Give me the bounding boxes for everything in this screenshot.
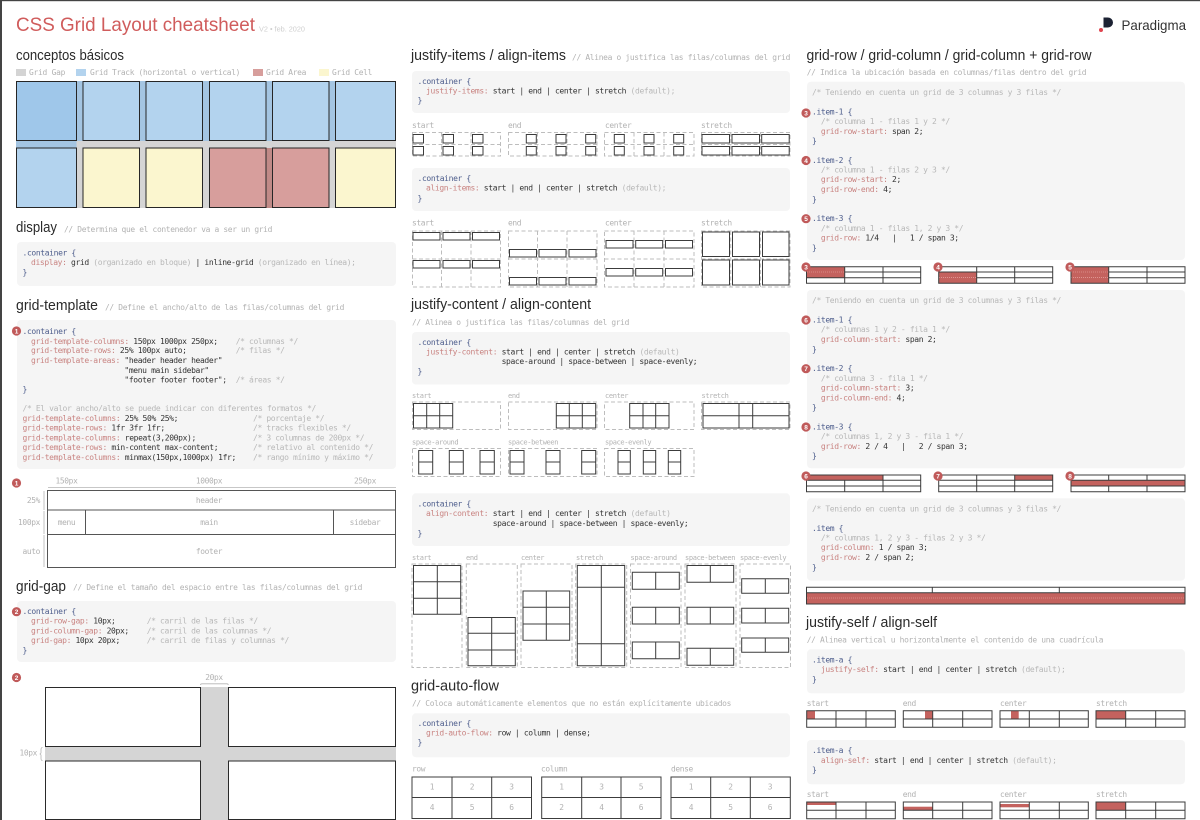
code: grid-row items: /* columna 1 - filas 1 y 2 */	[821, 117, 950, 126]
heading: grid-auto-flow: grid-auto-flow	[411, 679, 499, 695]
grid-auto-flow: dense: dense	[671, 764, 694, 774]
grid-auto-flow: row: 3	[509, 782, 514, 792]
code: justify-items: .container {	[418, 77, 471, 86]
grid-template diagram: main	[200, 518, 218, 527]
code: grid-column items: }	[812, 452, 816, 460]
legend: Grid Area	[266, 68, 307, 77]
title: CSS Grid Layout cheatsheet	[16, 14, 256, 36]
code: align-self: align-self: start | end | center | stretch (default);	[821, 756, 1057, 765]
justify-content examples row 1: start	[412, 392, 431, 400]
grid-template diagram: auto	[22, 547, 41, 556]
code: justify-items: justify-items: start | end | center | stretch (default);	[426, 86, 675, 96]
badge 5: 5	[804, 216, 808, 223]
code: grid-column items: /* columna 3 - fila 1 */	[821, 374, 928, 383]
badge 1 diagram: 1	[15, 480, 19, 487]
badge 6: 6	[804, 317, 808, 324]
code: grid-template: grid-template-columns: 25% 50% 25%;	[22, 414, 178, 423]
code: grid-row items	[807, 82, 1185, 260]
code: grid-column items	[807, 290, 1185, 468]
code: justify-self	[807, 649, 1185, 693]
code: grid-template: /* áreas */	[236, 376, 285, 384]
grid-template diagram: sidebar	[350, 518, 381, 527]
code: display	[17, 242, 396, 286]
code: grid-template: .container {	[22, 327, 76, 336]
heading: grid-gap	[16, 579, 363, 595]
code: grid-column items: .item-2 {	[812, 364, 852, 373]
justify-items examples: start	[412, 121, 434, 130]
code: grid-auto-flow: }	[418, 738, 422, 747]
align-content examples	[412, 554, 790, 668]
code: grid-column + grid-row: /* Teniendo en cuenta un grid de 3 columnas y 3 filas */	[812, 504, 1062, 514]
justify-items examples: stretch	[701, 121, 732, 130]
grid-template diagram: 1000px	[196, 476, 223, 486]
heading: grid-template: grid-template	[16, 298, 98, 314]
justify-content examples row 2	[412, 438, 694, 476]
grid-template diagram: menu	[58, 518, 76, 527]
comment: justify-self: // Alinea vertical u horizontalmente el contenido de una cuadrícula	[807, 636, 1104, 644]
heading: justify-self / align-self: justify-self / align-self	[805, 615, 938, 631]
grid-gap diagram: 10px	[19, 748, 38, 758]
justify-content examples row 1: stretch	[702, 392, 729, 400]
grid-row examples: 5	[1068, 264, 1072, 271]
code: grid-gap: /* carril de las columnas */	[147, 626, 272, 636]
grid-auto-flow: row	[412, 764, 532, 818]
code: grid-template: /* relativo al contenido */	[253, 443, 374, 452]
grid-row examples: 4	[936, 264, 940, 271]
justify-items examples	[412, 121, 790, 156]
code: justify-content: .container {	[418, 338, 471, 347]
code: grid-column + grid-row: /* columnas 1, 2 y 3 - filas 2 y 3 */	[821, 534, 986, 542]
badge 3: 3	[804, 110, 808, 117]
justify-items examples: end	[508, 121, 522, 130]
grid-column examples	[801, 471, 1185, 492]
code: grid-row items: .item-3 {	[812, 214, 852, 223]
code: grid-gap: grid-column-gap: 20px;	[31, 626, 129, 636]
code: grid-template: /* rango mínimo y máximo */	[253, 453, 374, 462]
align-content examples: center	[521, 554, 544, 562]
badge 1: 1	[15, 328, 19, 335]
code: grid-row items: /* Teniendo en cuenta un grid de 3 columnas y 3 filas */	[812, 88, 1062, 97]
code: justify-content: justify-content: start | end | center | stretch (default)	[426, 348, 679, 356]
grid-auto-flow: dense: 4	[689, 803, 694, 812]
grid-auto-flow: dense: 2	[728, 782, 733, 792]
code: grid-column items: }	[812, 345, 816, 354]
align-self examples	[807, 790, 1185, 819]
code: grid-row items: /* columna 1 - filas 2 y 3 */	[821, 166, 950, 174]
code: grid-template: /* columnas */	[236, 337, 299, 346]
basic concepts grid diagram	[16, 81, 396, 208]
code: grid-column items: grid-column-start: span 2;	[821, 335, 937, 344]
grid-auto-flow: column: 6	[639, 803, 644, 812]
code: grid-row items: .item-1 {	[812, 108, 852, 116]
justify-content examples row 2: space-between	[508, 438, 558, 446]
code: grid-column items: grid-column-end: 4;	[821, 394, 905, 402]
grid-template diagram	[18, 476, 396, 568]
code: justify-content	[412, 332, 790, 384]
code: justify-self: .item-a {	[812, 656, 852, 664]
badge 4: 4	[804, 158, 808, 165]
badge 1	[12, 326, 21, 336]
code: grid-column items: grid-column-start: 3;	[821, 384, 914, 392]
code: grid-template: /* tracks flexibles */	[253, 424, 351, 432]
badge 8	[801, 422, 811, 432]
code: grid-column + grid-row: .item {	[812, 524, 843, 533]
badge 8: 8	[804, 424, 808, 431]
align-content examples: space-around	[630, 554, 677, 562]
code: grid-row items: }	[812, 136, 816, 146]
code: grid-row items: grid-row-start: span 2;	[821, 127, 923, 136]
code: grid-column + grid-row: }	[812, 563, 816, 572]
code: justify-self: justify-self: start | end | center | stretch (default);	[821, 665, 1065, 674]
code: align-content: .container {	[418, 500, 471, 508]
badge 2 diagram	[12, 673, 21, 682]
code: grid-column items: grid-row: 2 / 4 | 2 / span 3;	[821, 442, 968, 451]
code: grid-gap: grid-gap: 10px 20px;	[31, 636, 120, 645]
grid-template diagram: 250px	[354, 476, 377, 486]
badge 3	[801, 108, 811, 118]
grid-template diagram: footer	[196, 547, 223, 556]
code: grid-gap	[17, 601, 396, 662]
badge 4	[801, 156, 811, 165]
code: grid-template: "menu main sidebar"	[124, 366, 209, 375]
code: display: }	[22, 268, 27, 277]
legend: Grid Gap	[29, 68, 66, 77]
heading: justify-items / align-items: justify-items / align-items	[410, 48, 566, 64]
grid-auto-flow: row: 5	[470, 803, 475, 812]
justify-self examples	[807, 699, 1185, 727]
justify-self examples: end	[903, 699, 916, 708]
grid-auto-flow: column	[541, 764, 661, 818]
grid-template diagram: 150px	[56, 476, 78, 486]
align-content examples: space-between	[685, 554, 735, 562]
grid-auto-flow: dense: 5	[728, 803, 733, 812]
justify-self examples: stretch	[1096, 699, 1127, 708]
code: grid-row items: /* columna 1 - filas 1, 2 y 3 */	[821, 224, 964, 233]
grid-auto-flow: row: 4	[430, 803, 435, 812]
legend: Grid Cell	[332, 68, 372, 77]
align-self examples: center	[1000, 790, 1027, 799]
badge 7	[801, 364, 811, 373]
justify-self examples: center	[1000, 699, 1027, 708]
code: grid-column items: /* columnas 1, 2 y 3 - fila 1 */	[821, 432, 964, 441]
justify-content examples row 1: center	[605, 392, 628, 400]
code: align-self: .item-a {	[812, 746, 852, 755]
code: grid-template: /* filas */	[236, 346, 285, 355]
badge 7: 7	[804, 366, 808, 373]
grid-template diagram: header	[196, 496, 223, 505]
code: grid-template: grid-template-rows: 1fr 3fr 1fr;	[22, 424, 165, 432]
code: align-items	[412, 168, 790, 211]
code: grid-template: grid-template-columns: 150px 1000px 250px;	[31, 337, 218, 346]
heading: grid-gap: // Define el tamaño del espacio entre las filas/columnas del grid	[73, 583, 363, 592]
code: grid-column + grid-row	[807, 498, 1185, 581]
grid-gap diagram	[19, 673, 396, 820]
align-items examples	[412, 218, 790, 287]
code: align-self: }	[812, 766, 816, 774]
justify-items examples: center	[605, 121, 632, 130]
code: align-self	[807, 740, 1185, 784]
heading: display: // Determina que el contenedor va a ser un grid	[64, 225, 273, 234]
code: grid-column items: .item-3 {	[812, 422, 852, 432]
code: grid-gap: /* carril de las filas */	[147, 616, 258, 626]
align-self examples: start	[807, 790, 829, 799]
code: align-items: align-items: start | end | center | stretch (default);	[426, 184, 666, 192]
justify-content examples row 2: space-evenly	[605, 438, 651, 446]
code: grid-column items: }	[812, 403, 816, 412]
badge 6	[801, 315, 811, 325]
justify-content examples row 1	[412, 392, 790, 430]
grid-row examples: 3	[804, 264, 808, 271]
grid-template diagram: 100px	[18, 518, 41, 527]
align-items examples: center	[605, 218, 632, 228]
code: grid-template: "footer footer footer";	[124, 376, 227, 384]
code: grid-auto-flow: .container {	[418, 719, 471, 728]
heading: grid-gap: grid-gap	[16, 579, 66, 595]
heading: grid-row / grid-column: grid-row / grid-column / grid-column + grid-row	[806, 48, 1092, 64]
badge 2 diagram: 2	[15, 675, 19, 682]
code: display: display: grid (organizado en bloque) | inline-grid (organizado en línea);	[31, 258, 356, 267]
align-items examples: start	[412, 218, 434, 228]
heading: justify-items / align-items	[410, 48, 791, 64]
code: grid-column items: /* Teniendo en cuenta un grid de 3 columnas y 3 filas */	[812, 296, 1062, 305]
legend	[16, 68, 372, 77]
grid-auto-flow: row: 6	[509, 803, 514, 812]
code: align-content: space-around | space-between | space-evenly;	[493, 519, 688, 528]
badge 2	[12, 607, 21, 616]
heading: display	[16, 220, 273, 236]
badge 2: 2	[15, 609, 19, 616]
grid-auto-flow: column: 3	[599, 782, 604, 792]
code: grid-column items: .item-1 {	[812, 316, 852, 324]
align-self examples: end	[903, 790, 916, 799]
heading: grid-template: // Define el ancho/alto de las filas/columnas del grid	[105, 303, 345, 312]
code: justify-items: }	[418, 96, 422, 105]
grid-auto-flow: column: column	[541, 764, 568, 774]
code: grid-row items: grid-row: 1/4 | 1 / span 3;	[821, 234, 959, 242]
grid-column examples: 6	[804, 473, 808, 480]
grid-gap diagram: 20px	[205, 673, 223, 682]
heading: display: display	[16, 220, 58, 236]
code: grid-template: grid-template-areas: "header header header"	[31, 356, 222, 365]
grid-column examples: 7	[936, 473, 940, 480]
code: align-items: }	[418, 194, 422, 203]
code: grid-template: }	[22, 385, 27, 394]
grid-row examples	[801, 262, 1185, 283]
code: grid-template	[17, 320, 396, 469]
code: grid-template: grid-template-rows: 25% 100px auto;	[31, 346, 187, 355]
code: grid-auto-flow: grid-auto-flow: row | column | dense;	[426, 728, 591, 738]
code: display: .container {	[22, 248, 76, 258]
badge 5	[801, 214, 811, 223]
align-content examples: space-evenly	[740, 554, 786, 562]
grid-auto-flow: dense	[671, 764, 790, 818]
grid-auto-flow: dense: 1	[689, 782, 694, 792]
grid-auto-flow: row: row	[412, 764, 426, 774]
badge 1 diagram	[12, 478, 21, 488]
code: justify-items	[412, 71, 790, 113]
code: grid-gap: /* carril de filas y columnas */	[147, 636, 290, 645]
heading: conceptos básicos: conceptos básicos	[16, 48, 124, 64]
code: grid-template: /* 3 columnas de 200px */	[253, 434, 365, 442]
code: justify-self: }	[812, 675, 816, 684]
code: grid-gap: .container {	[22, 607, 76, 616]
align-items examples: end	[508, 218, 522, 228]
code: grid-row items: grid-row-start: 2;	[821, 175, 901, 184]
grid-template diagram: 25%	[27, 496, 41, 505]
grid-auto-flow: column: 2	[559, 803, 564, 812]
align-items examples: stretch	[701, 218, 732, 228]
code: align-items: .container {	[418, 174, 471, 183]
code: grid-template: grid-template-columns: repeat(3,200px);	[22, 434, 196, 442]
align-content examples: stretch	[576, 554, 603, 562]
align-content examples: end	[466, 554, 478, 562]
code: justify-content: }	[418, 367, 422, 376]
comment: justify-content: // Alinea o justifica las filas/columnas del grid	[412, 318, 630, 327]
code: grid-template: grid-template-columns: minmax(150px,1000px) 1fr;	[22, 453, 236, 462]
grid-auto-flow: row: 1	[430, 782, 435, 792]
code: grid-template: /* porcentaje */	[253, 414, 325, 423]
grid-auto-flow: row: 2	[470, 782, 475, 792]
code: grid-row items: }	[812, 244, 816, 252]
code: justify-content: space-around | space-between | space-evenly;	[502, 357, 697, 366]
heading: justify-items / align-items: // Alinea o justifica las filas/columnas del grid	[572, 53, 791, 62]
grid-auto-flow: dense: 6	[768, 803, 773, 812]
comment: grid-row: // Indica la ubicación basada en columnas/filas dentro del grid	[807, 67, 1087, 77]
grid-auto-flow: dense: 3	[768, 782, 773, 792]
justify-content examples row 2: space-around	[412, 438, 458, 446]
justify-self examples: start	[807, 699, 829, 708]
code: grid-gap: grid-row-gap: 10px;	[31, 616, 116, 626]
code: grid-auto-flow	[412, 713, 790, 757]
code: grid-row items: .item-2 {	[812, 156, 852, 165]
code: grid-column items: /* columnas 1 y 2 - fila 1 */	[821, 325, 950, 334]
align-content examples: start	[412, 554, 431, 562]
title: V2 • feb. 2020	[259, 26, 305, 34]
code: grid-template: /* El valor ancho/alto se puede indicar con diferentes formatos */	[22, 404, 317, 413]
grid-auto-flow: column: 1	[559, 782, 564, 792]
code: grid-template: grid-template-rows: min-content max-content;	[22, 443, 218, 452]
grid-auto-flow: column: 4	[599, 803, 604, 812]
code: align-content	[412, 493, 790, 546]
code: grid-row items: grid-row-end: 4;	[821, 185, 892, 194]
logo: Paradigma: Paradigma	[1122, 17, 1186, 33]
grid-auto-flow: column: 5	[639, 782, 644, 792]
code: grid-row items: }	[812, 195, 816, 204]
legend: Grid Track (horizontal o vertical)	[90, 68, 240, 77]
comment: grid-auto-flow: // Coloca automáticamente elementos que no están explícitamente ubicados	[412, 699, 731, 708]
code: grid-column + grid-row: grid-row: 2 / span 2;	[821, 553, 914, 562]
heading: grid-template	[16, 298, 345, 314]
align-self examples: stretch	[1096, 790, 1127, 799]
justify-content examples row 1: end	[508, 392, 520, 400]
heading: justify-content / align-content: justify-content / align-content	[410, 297, 591, 313]
code: align-content: }	[418, 529, 422, 538]
grid-column examples: 8	[1068, 473, 1072, 480]
code: align-content: align-content: start | end | center | stretch (default)	[426, 509, 671, 518]
code: grid-gap: }	[22, 646, 27, 655]
code: grid-column + grid-row: grid-column: 1 / span 3;	[821, 543, 928, 552]
wide grid example	[806, 587, 1185, 604]
